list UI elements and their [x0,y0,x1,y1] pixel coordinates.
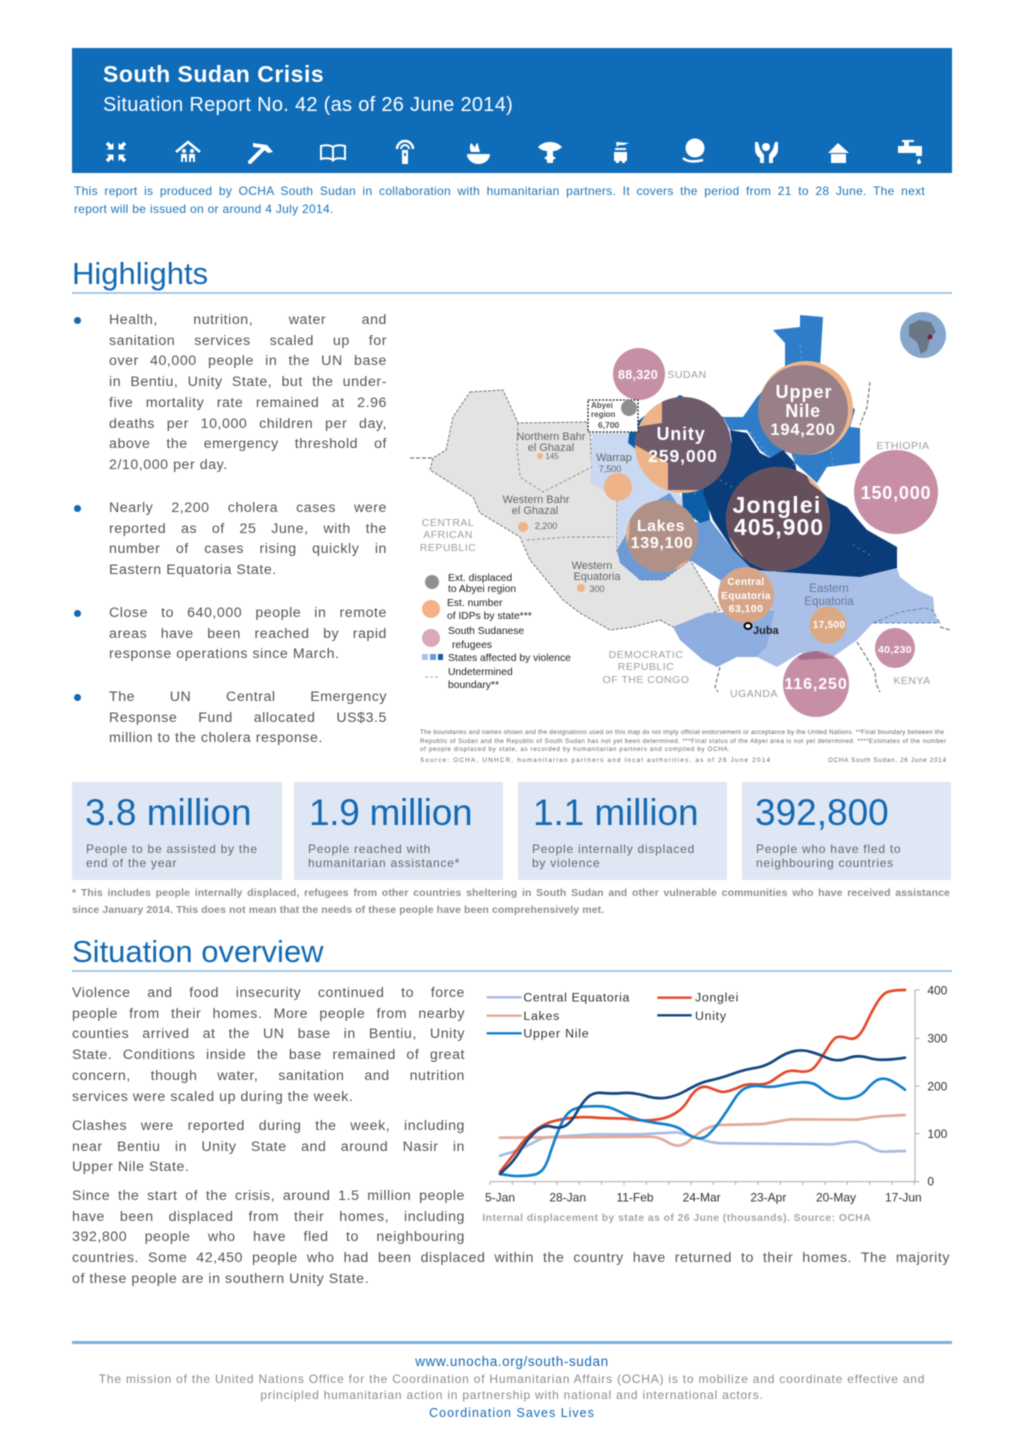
stat: internally displaced: People internally displaced [532,842,695,856]
footnote: * This includes people internally displaced, refugees from other countries sheltering in South Sudan and other vulnerable communities who have received assistance [72,887,950,899]
y axis labels: 200 [927,1079,948,1093]
mission statement [98,1372,925,1402]
bullet 4: The UN Central Emergency [109,689,387,705]
bullet 1 [73,312,387,473]
paragraph 3: countries. Some 42,450 people who had been displaced within the country have returned to their homes. The majority [72,1250,950,1266]
marker: Northern Bahr el Ghazal [537,453,543,459]
paragraph 3: Since the start of the crisis, around 1.5 million people [72,1188,465,1204]
stat: fled to neighbouring countries: 392,800 [755,792,889,833]
report title: South Sudan Crisis [103,61,324,87]
report subtitle: Situation Report No. 42 (as of 26 June 2014) [103,94,513,116]
map: country labels: OF THE CONGO [603,674,689,686]
map: legend: Undetermined [448,667,513,678]
map: country labels [420,369,931,700]
bullet 1: five mortality rate remained at 2.96 [109,395,387,411]
marker: Jonglei overlay [725,466,831,572]
marker: Jonglei orange base [726,467,830,571]
paragraph 2: near Bentiu in Unity State and around Nasir in [72,1139,465,1155]
paragraph 3: have been displaced from their homes, including [72,1209,465,1225]
map: grey state labels: el Ghazal [512,505,558,517]
mission statement: The mission of the United Nations Office for the Coordination of Humanitarian Affairs (OCHA) is to mobilize and coordinate effective and [99,1372,925,1386]
stat: people reached: 1.9 million [309,792,472,833]
x axis labels: 23-Apr [750,1190,786,1204]
map: Central Equatoria state [673,610,775,667]
map: country labels: REPUBLIC [618,661,674,673]
x axis labels: 5-Jan [485,1190,515,1204]
icon: food bowl [467,143,490,164]
stat: people to be assisted: end of the year [86,856,177,870]
chart caption: Internal displacement by state as of 26 June (thousands). Source: OCHA [482,1213,871,1224]
x axis labels: 20-May [816,1190,856,1204]
map: grey state labels [502,431,854,608]
stat: people to be assisted: People to be assisted by the [86,842,258,856]
map: state labels: Nile [785,401,821,421]
stat: fled to neighbouring countries [742,782,951,880]
intro note: This report is produced by OCHA South Sudan in collaboration with humanitarian partners. It covers the period from 21 to 28 June. The next [74,184,925,198]
text: situation overview [72,985,950,1287]
bullet 1: 2/10,000 per day. [109,457,228,473]
marker: Unity overlay [635,392,740,490]
icon: nutrition child [683,138,704,161]
map: disclaimer [420,729,946,764]
map: legend: Est. number [447,598,503,609]
map: state labels: 150,000 [861,483,931,503]
bullet 2: Nearly 2,200 cholera cases were [109,500,387,516]
map: Juba marker: Juba [753,625,780,637]
map: state labels: Upper [775,382,833,402]
map: grey state labels: Warrap [596,452,632,464]
map: refugee circles [613,348,938,717]
series: Central Equatoria [500,1132,905,1156]
paragraph 3 [72,1188,950,1287]
bullet 3: areas have been reached by rapid [109,626,387,642]
map: grey state labels: Western [572,560,612,572]
x axis labels: 24-Mar [683,1190,721,1204]
map: grey state labels: 300 [589,584,605,594]
map: Abyei region box: Abyei [591,401,613,410]
marker: Upper Nile orange rim [759,361,853,455]
marker: Eastern Equatoria [810,606,846,644]
map: globe inset [900,312,946,358]
icon: coordination [107,143,125,161]
paragraph 1 [72,985,465,1105]
marker: Sudan refugees [613,348,665,400]
bullet 2: reported as of 25 June, with the [109,521,387,537]
footer [98,1354,925,1420]
chart legend [487,991,739,1040]
mission statement: principled humanitarian action in partnership with national and international actors. [260,1388,764,1402]
legend: Jonglei [657,991,739,1005]
map: country labels: KENYA [893,675,931,687]
x axis labels: 17-Jun [885,1190,922,1204]
map: state labels: 63,100 [729,603,763,615]
line chart: internal displacement by state [482,983,948,1224]
bullet 1: in Bentiu, Unity State, but the under- [109,374,387,390]
icon: open book [321,145,345,160]
legend: Unity [657,1009,727,1023]
map: legend: Ext. displaced [448,573,512,584]
map: Kenya Ethiopia boundary [873,608,940,623]
map: state labels: Equatoria [721,591,771,602]
paragraph 3: 392,800 people who have fled to neighbouring [72,1229,465,1245]
marker: Warrap orange [604,473,632,501]
map: grey state labels: Equatoria [804,596,854,608]
stat: internally displaced: 1.1 million [533,792,698,833]
y axis labels: 0 [927,1175,934,1189]
map: IDP circles [518,361,853,644]
map: Eastern Equatoria state [720,568,940,667]
marker: Lakes orange base [626,500,698,572]
legend: Jonglei: Jonglei [695,991,739,1005]
map: state labels: Central [727,577,765,588]
map: Abyei region box: 6,700 [598,420,620,430]
series: Jonglei [500,990,905,1172]
footnote [72,887,950,916]
map: country labels: CENTRAL [422,517,474,529]
legend: Upper Nile [487,1026,589,1040]
map: county speckles [690,345,870,575]
map: legend: refugees [452,640,492,651]
heading: situation overview: Situation overview [72,934,324,969]
map: legend: boundary** [448,680,499,691]
map: disclaimer: Source: OCHA, UNHCR, humanitarian partners and local authorities, as of 26 June 2014 [420,757,770,764]
map: grey state labels: 2,200 [535,521,557,531]
map: Unity state [628,395,732,523]
bullet 4: million to the cholera response. [109,730,323,746]
icon: caduceus [538,142,562,163]
map: internal state boundaries [517,423,613,540]
map: Warrap state [590,433,690,553]
map: neighbouring boundaries [410,382,950,692]
footer url: www.unocha.org/south-sudan [415,1354,609,1369]
map: state labels: 405,900 [734,514,824,540]
map: state labels: 259,000 [648,446,718,466]
map: state labels [618,368,931,693]
stat: internally displaced [518,782,727,880]
stat: internally displaced: by violence [532,856,600,870]
map: disclaimer: OCHA South Sudan, 26 June 2014 [828,757,946,764]
stat: people to be assisted: 3.8 million [85,792,252,833]
marker: Lakes overlay [626,500,698,572]
bullet 3 [73,605,387,662]
y axis labels: 100 [927,1127,948,1141]
marker: Western Bahr el Ghazal [518,522,528,532]
intro note: report will be issued on or around 4 July 2014. [74,202,334,216]
map: Jonglei state [703,430,897,577]
map: grey state labels: el Ghazal [528,442,574,454]
map: legend: to Abyei region [448,584,516,595]
map: state labels: Jonglei [733,492,821,518]
legend: Upper Nile: Upper Nile [523,1026,589,1040]
icon: house [828,143,849,163]
icon: telecommunications handset [397,141,413,164]
map: legend: States affected by violence [448,653,571,664]
marker: Ethiopia refugees [854,450,938,534]
map: grey state labels: 7,500 [599,464,621,474]
map: country labels: SUDAN [667,369,707,381]
intro note [74,184,926,216]
marker: Unity orange base [635,397,731,493]
map: disclaimer: Republic of Sudan and the Republic of South Sudan has not yet been determined. ***Final status of the Abyei area is not yet determined. ****Estimates of the number [420,738,946,745]
map: disclaimer: of people displaced by state, as recorded by humanitarian partners and compiled by OCHA. [420,746,730,753]
map: state labels: 17,500 [813,620,845,631]
map: country labels: AFRICAN [423,529,473,541]
map: disclaimer: The boundaries and names shown and the designations used on this map do not imply official endorsement or acceptance by the United Nations. **Final boundary between the [420,729,944,736]
map: country labels: REPUBLIC [420,542,476,554]
icon: hammer [250,143,273,162]
legend: Unity: Unity [695,1009,727,1023]
map: grey state labels: 145 [545,452,559,461]
map: state labels: 194,200 [770,421,836,439]
icon: logistics [614,142,629,163]
y axis labels: 300 [927,1032,948,1046]
map: state labels: 116,250 [784,676,848,693]
map: legend: South Sudanese [448,626,524,637]
stat: people reached: People reached with [308,842,431,856]
heading: highlights: Highlights [72,256,208,291]
map: South Sudan displacement [410,311,950,764]
map: country labels: UGANDA [730,688,778,700]
x axis labels [485,1190,922,1204]
map: legend [422,573,571,691]
marker: Uganda overlap with state [796,651,835,660]
paragraph 2 [72,1118,465,1175]
series: Lakes [500,1115,905,1146]
map: Abyei region box: region [591,410,616,419]
map: Lakes state [617,493,753,580]
chart axes [490,990,920,1185]
bullet 2: Eastern Equatoria State. [109,562,277,578]
map: grey state labels: Northern Bahr [516,431,586,443]
tagline: Coordination Saves Lives [429,1406,595,1420]
bullet 3: Close to 640,000 people in remote [109,605,387,621]
x axis labels: 11-Feb [616,1190,654,1204]
map: country labels: DEMOCRATIC [609,649,683,661]
paragraph 2: Upper Nile State. [72,1159,189,1175]
stat: people to be assisted [72,782,282,880]
cluster icons row [105,138,923,165]
bullet 1: over 40,000 people in the UN base [109,353,387,369]
map: grey state labels: Western Bahr [502,494,570,506]
map: state labels: 40,230 [878,644,912,656]
paragraph 2: Clashes were reported during the week, including [72,1118,465,1134]
bullet 2: number of cases rising quickly in [109,541,387,557]
bullet 1: above the emergency threshold of [109,436,387,452]
map: grey unaffected states [430,390,720,630]
bullet 3: response operations since March. [109,646,340,662]
x axis labels: 28-Jan [549,1190,586,1204]
y axis labels [927,983,948,1189]
map: Juba marker [744,623,780,637]
bullet 1: deaths per 10,000 children per day, [109,416,387,432]
footnote: since January 2014. This does not mean that the needs of these people have been comprehensively met. [72,904,604,916]
paragraph 1: concern, though water, sanitation and nutrition [72,1068,465,1084]
map: state labels: 88,320 [618,368,658,382]
paragraph 1: counties arrived at the UN base in Bentiu, Unity [72,1026,465,1042]
map: Upper Nile state [723,315,860,483]
map: country labels: ETHIOPIA [876,440,930,452]
paragraph 1: people from their homes. More people from nearby [72,1006,465,1022]
marker: Kenya refugees [875,628,915,668]
map: legend: of IDPs by state*** [447,611,532,622]
legend: Central Equatoria: Central Equatoria [523,991,630,1005]
stat: people reached [294,782,503,880]
legend: Lakes: Lakes [523,1009,560,1023]
bullet 2 [73,500,387,578]
marker: Upper Nile [758,365,848,455]
paragraph 3: of these people are in southern Unity State. [72,1271,369,1287]
y axis labels: 400 [927,983,948,997]
paragraph 1: services were scaled up during the week. [72,1089,353,1105]
paragraph 1: Violence and food insecurity continued to force [72,985,465,1001]
bullet 4: Response Fund allocated US$3.5 [109,710,387,726]
icon: water tap [898,140,922,164]
bullet 1: Health, nutrition, water and [109,312,387,328]
map: state labels: Unity [656,424,706,444]
marker: Central Equatoria [718,567,774,623]
marker: Uganda refugees [783,651,849,717]
bullet 4 [73,689,387,746]
stat: fled to neighbouring countries: People who have fled to [756,842,901,856]
stat: people reached: humanitarian assistance* [308,856,460,870]
icon: shelter family [176,142,200,162]
map: grey state labels: Eastern [809,583,849,595]
legend: Lakes [487,1009,560,1023]
series: Upper Nile [500,1079,905,1176]
map: state labels: 139,100 [631,535,693,552]
icon: protection [755,142,778,163]
series: Unity [500,1050,905,1174]
paragraph 1: State. Conditions inside the base remained of great [72,1047,465,1063]
map: grey state labels: Equatoria [573,571,621,583]
marker: Western Equatoria [577,584,585,592]
bullet list: highlights [73,312,387,746]
header banner [72,48,952,173]
bullet 1: sanitation services scaled up for [109,333,387,349]
map: Abyei region box [588,400,638,432]
map: state labels: Lakes [637,518,685,535]
stat: fled to neighbouring countries: neighbouring countries [756,856,894,870]
